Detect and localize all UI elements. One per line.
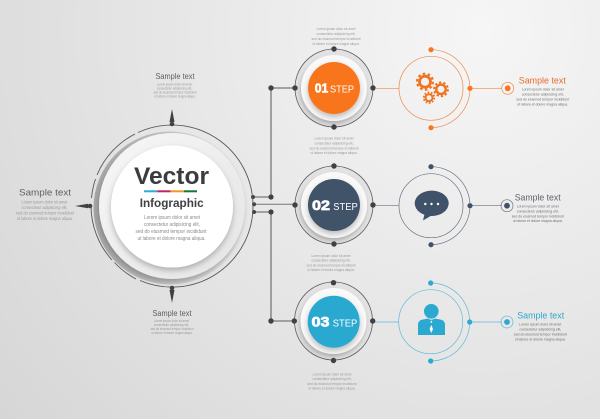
text block: bottom sample: ut labore et dolore magna aliqua. bbox=[152, 331, 192, 335]
text block: step 2 sample: consectetur adipisicing elit, bbox=[517, 210, 559, 214]
text block: above step 1: consectetur adipisicing elit, bbox=[316, 32, 356, 36]
text block: below step 2 bbox=[306, 254, 356, 272]
arrow and dot: top bbox=[170, 109, 174, 126]
text block: step 2 sample: sed do eiusmod tempor incididunt bbox=[512, 214, 565, 218]
text block: above step 1: sed do eiusmod tempor incididunt bbox=[312, 37, 360, 41]
text block: step 3 sample: Sample text bbox=[517, 311, 565, 322]
text block: left sample bbox=[16, 188, 75, 221]
panel: step 1 bbox=[292, 46, 376, 130]
text block: bottom sample: sed do eiusmod tempor incididunt bbox=[150, 327, 194, 331]
text block: top sample: sed do eiusmod tempor incididunt bbox=[154, 90, 196, 94]
text block: top sample: ut labore et dolore magna aliqua. bbox=[154, 94, 196, 98]
icon: speech bubble bbox=[415, 191, 449, 220]
text block: below step 3: consectetur adipisicing elit, bbox=[312, 377, 352, 381]
step label: 01 bbox=[315, 80, 328, 96]
text block: left sample: sed do eiusmod tempor incididunt bbox=[16, 210, 75, 216]
text block: top sample bbox=[154, 72, 196, 98]
heading: Vector: Vector bbox=[134, 163, 209, 190]
text block: below step 1: Lorem ipsum dolor sit amet bbox=[314, 136, 354, 140]
subheading: Infographic: Infographic bbox=[140, 196, 204, 210]
text block: top sample: consectetur adipisicing elit, bbox=[157, 86, 192, 90]
text block: step 2 sample: Lorem ipsum dolor sit amet bbox=[517, 204, 560, 208]
text block: below step 3: ut labore et dolore magna aliqua. bbox=[308, 386, 356, 390]
text block: below step 2: consectetur adipisicing elit, bbox=[312, 258, 350, 262]
text block: bottom sample: Sample text bbox=[152, 309, 192, 318]
text block: step 1 sample bbox=[516, 76, 570, 107]
text block: step 1 sample: Sample text bbox=[519, 76, 566, 86]
text block: step 3 sample bbox=[514, 311, 568, 342]
text block: left sample: consectetur adipisicing elit, bbox=[22, 205, 68, 210]
text block: below step 1: consectetur adipisicing elit, bbox=[314, 142, 354, 146]
text block: step 3 sample: Lorem ipsum dolor sit amet bbox=[519, 323, 562, 327]
text block: step 1 sample: consectetur adipisicing elit, bbox=[522, 92, 564, 96]
text block: left sample: Lorem ipsum dolor sit amet bbox=[22, 200, 68, 204]
text block: bottom sample bbox=[150, 309, 194, 335]
text block: left sample: ut labore et dolore magna aliqua. bbox=[17, 216, 73, 221]
text block: bottom sample: consectetur adipisicing elit, bbox=[154, 323, 189, 327]
step label: STEP bbox=[333, 318, 358, 330]
broken outer ring bbox=[91, 125, 253, 287]
panel: blue icon rings bbox=[375, 280, 513, 364]
text block: step 1 sample: ut labore et dolore magna aliqua. bbox=[517, 103, 568, 107]
text block: above step 1: ut labore et dolore magna aliqua. bbox=[312, 42, 360, 46]
text block: left sample: Sample text bbox=[19, 188, 71, 198]
text block: step 3 sample: ut labore et dolore magna aliqua. bbox=[515, 338, 566, 342]
text block: below step 1: sed do eiusmod tempor incididunt bbox=[310, 146, 358, 150]
panel: main circle bbox=[91, 125, 253, 287]
text block: top sample: Sample text bbox=[156, 72, 195, 81]
text block: step 1 sample: sed do eiusmod tempor incididunt bbox=[516, 98, 570, 102]
text block: step 2 sample: ut labore et dolore magna aliqua. bbox=[513, 219, 563, 223]
body text bbox=[136, 215, 207, 242]
text block: below step 3: Lorem ipsum dolor sit amet bbox=[312, 372, 352, 376]
step label bbox=[312, 314, 358, 330]
step dots bbox=[292, 163, 376, 247]
text block: below step 2: Lorem ipsum dolor sit amet bbox=[312, 254, 350, 258]
text block: step 3 sample: consectetur adipisicing elit, bbox=[519, 328, 561, 332]
body text: Lorem ipsum dolor sit amet bbox=[144, 215, 201, 221]
step dots bbox=[292, 280, 375, 363]
text block: below step 3: sed do eiusmod tempor incididunt bbox=[308, 382, 356, 386]
icon: person bbox=[418, 304, 445, 335]
text block: below step 1: ut labore et dolore magna aliqua. bbox=[310, 151, 358, 155]
step label: 02 bbox=[312, 197, 330, 213]
text block: bottom sample: Lorem ipsum dolor sit amet bbox=[154, 319, 189, 323]
step label: STEP bbox=[333, 202, 358, 213]
text block: below step 2: sed do eiusmod tempor incididunt bbox=[306, 264, 356, 268]
panel: navy icon rings bbox=[375, 164, 513, 247]
text block: above step 1 bbox=[312, 27, 360, 46]
step dots bbox=[292, 46, 376, 130]
panel: orange icon rings bbox=[375, 47, 514, 130]
arrow and dot: bottom bbox=[170, 286, 174, 303]
text block: below step 1 bbox=[310, 136, 358, 155]
text block: step 1 sample: Lorem ipsum dolor sit amet bbox=[522, 88, 565, 92]
icon: gears bbox=[417, 74, 448, 103]
step label: 03 bbox=[312, 314, 330, 330]
body text: consectetur adipisicing elit, bbox=[144, 222, 200, 228]
text block: top sample: Lorem ipsum dolor sit amet bbox=[157, 82, 192, 86]
panel: step 2 bbox=[292, 163, 376, 247]
text block: step 3 sample: sed do eiusmod tempor incididunt bbox=[514, 333, 568, 337]
text block: step 2 sample bbox=[512, 192, 565, 223]
connector lines from main circle to steps bbox=[251, 85, 295, 324]
step label: STEP bbox=[330, 84, 354, 96]
body text: ut labore et dolore magna aliqua. bbox=[138, 236, 206, 242]
step label bbox=[315, 80, 354, 96]
text block: step 2 sample: Sample text bbox=[515, 192, 561, 204]
body text: sed do eiusmod tempor incididunt bbox=[136, 229, 207, 235]
step label bbox=[312, 197, 358, 213]
arrow and dot: left bbox=[75, 204, 92, 208]
panel: step 3 bbox=[292, 280, 375, 363]
text block: below step 2: ut labore et dolore magna aliqua. bbox=[308, 268, 354, 272]
colour bar bbox=[144, 190, 197, 192]
text block: above step 1: Lorem ipsum dolor sit amet bbox=[316, 27, 356, 31]
text block: below step 3 bbox=[308, 372, 356, 390]
